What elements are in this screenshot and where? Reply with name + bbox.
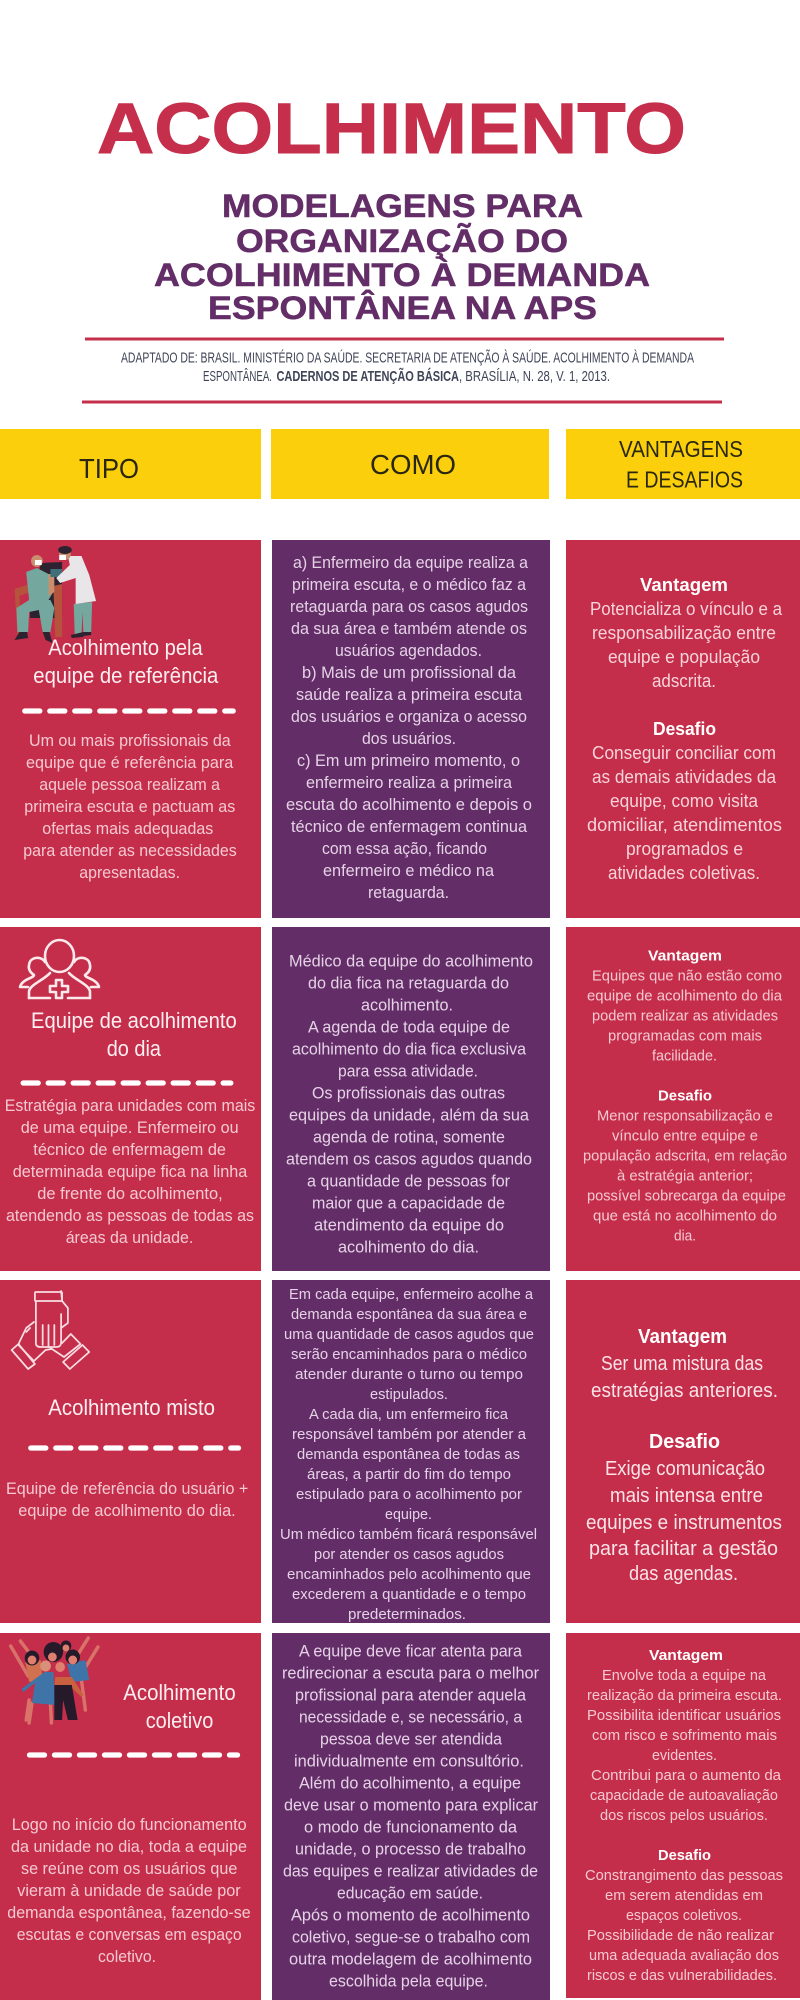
column header: vantagens e desafios: VANTAGENS (619, 436, 743, 462)
description: primeira escuta e pactuam as (24, 798, 235, 816)
description: equipe de acolhimento do dia. (18, 1502, 236, 1520)
description: Logo no início do funcionamento (12, 1816, 247, 1834)
panel: como, acolhimento coletivo: redirecionar a escuta para o melhor (282, 1665, 539, 1683)
heading: do dia (107, 1036, 162, 1061)
panel: como, acolhimento misto: atender durante o turno ou tempo (295, 1366, 523, 1383)
subtitle: ACOLHIMENTO À DEMANDA (154, 257, 650, 293)
panel: como, equipe de acolhimento do dia: maior que a capacidade de (312, 1195, 505, 1213)
panel: como, equipe de referência: escuta do acolhimento e depois o (286, 796, 532, 814)
panel: vantagem e desafio, acolhimento coletivo: Envolve toda a equipe na (602, 1667, 767, 1684)
panel: vantagem e desafio, acolhimento misto: Ser uma mistura das (601, 1353, 763, 1375)
panel: vantagem e desafio, equipe de acolhimento do dia (566, 927, 800, 1271)
column header: tipo: TIPO (79, 453, 139, 484)
panel: como, equipe de referência: b) Mais de um profissional da (302, 664, 517, 682)
panel: vantagem e desafio, acolhimento coletivo: Contribui para o aumento da (591, 1767, 782, 1784)
panel: como, acolhimento coletivo: Além do acolhimento, a equipe (299, 1775, 521, 1793)
panel: vantagem e desafio, acolhimento coletivo: uma adequada avaliação dos (589, 1947, 779, 1964)
panel: acolhimento pela equipe de referência (0, 540, 261, 918)
panel: como, acolhimento misto: encaminhados pelo acolhimento que (287, 1566, 531, 1583)
panel: como, equipe de acolhimento do dia: equipes da unidade, além da sua (289, 1107, 530, 1125)
panel: vantagem e desafio, equipe de referência: atividades coletivas. (608, 863, 760, 883)
description: técnico de enfermagem de (33, 1141, 226, 1159)
icon: medical team (20, 940, 99, 998)
panel: vantagem e desafio, acolhimento coletivo (566, 1633, 800, 1998)
description: demanda espontânea, fazendo-se (7, 1904, 251, 1922)
panel: como, equipe de referência: a) Enfermeiro da equipe realiza a (293, 554, 529, 572)
heading: equipe de referência (33, 663, 219, 688)
panel: vantagem e desafio, acolhimento misto: das agendas. (629, 1563, 738, 1585)
panel: vantagem e desafio, equipe de acolhimento do dia: Menor responsabilização e (597, 1108, 773, 1125)
panel: como, equipe de acolhimento do dia (272, 927, 550, 1271)
panel: como, acolhimento coletivo: necessidade e, se necessário, a (299, 1709, 523, 1727)
panel: vantagem e desafio, acolhimento misto: equipes e instrumentos (586, 1512, 782, 1534)
panel: vantagem e desafio, equipe de referência: Conseguir conciliar com (592, 743, 776, 763)
panel: vantagem e desafio, equipe de referência: Vantagem (640, 575, 728, 595)
source citation (121, 350, 694, 385)
panel: como, acolhimento misto: excederem a quantidade e o tempo (292, 1586, 526, 1603)
panel: como, equipe de acolhimento do dia: Médico da equipe do acolhimento (289, 953, 533, 971)
panel: vantagem e desafio, acolhimento misto: Desafio (649, 1431, 720, 1453)
panel: como, acolhimento misto: demanda espontânea de todas as (297, 1446, 520, 1463)
panel: como, equipe de acolhimento do dia: a quantidade de pessoas for (307, 1173, 510, 1191)
panel: vantagem e desafio, acolhimento coletivo: Possibilita identificar usuários (587, 1707, 781, 1724)
panel: como, acolhimento misto: por atender os casos agudos (314, 1546, 504, 1563)
panel: vantagem e desafio, equipe de acolhimento do dia: Vantagem (648, 948, 722, 965)
panel: vantagem e desafio, equipe de acolhimento do dia: população adscrita, em relação (583, 1148, 787, 1165)
column header: vantagens e desafios: E DESAFIOS (626, 466, 743, 492)
icon: nurse attending patient (15, 546, 96, 643)
panel: como, equipe de referência: com essa ação, ficando (322, 840, 487, 858)
subtitle: ORGANIZAÇÃO DO (236, 223, 568, 259)
panel: vantagem e desafio, equipe de acolhimento do dia: Equipes que não estão como (592, 968, 782, 985)
panel: como, equipe de referência: enfermeiro e médico na (323, 862, 495, 880)
description: ofertas mais adequadas (42, 820, 213, 838)
panel: vantagem e desafio, equipe de referência: Desafio (653, 719, 716, 739)
panel: como, equipe de acolhimento do dia: do dia fica na retaguarda do (308, 975, 509, 993)
panel: vantagem e desafio, acolhimento misto: Vantagem (638, 1326, 727, 1348)
description: vieram à unidade de saúde por (17, 1882, 241, 1900)
panel: como, acolhimento misto: uma quantidade de casos agudos que (284, 1326, 534, 1343)
panel: como, equipe de referência: dos usuários e organiza o acesso (291, 708, 527, 726)
panel: como, equipe de referência: primeira escuta, e o médico faz a (292, 576, 527, 594)
panel: vantagem e desafio, acolhimento misto (566, 1280, 800, 1623)
panel: vantagem e desafio, acolhimento coletivo: capacidade de autoavaliação (590, 1787, 778, 1804)
description: de uma equipe. Enfermeiro ou (21, 1119, 239, 1137)
panel: vantagem e desafio, acolhimento misto: para facilitar a gestão (589, 1538, 778, 1560)
panel: como, equipe de referência: retaguarda. (368, 884, 449, 902)
panel: vantagem e desafio, acolhimento coletivo: evidentes. (652, 1747, 717, 1764)
panel: vantagem e desafio, equipe de referência: domiciliar, atendimentos (587, 815, 782, 835)
panel: vantagem e desafio, acolhimento coletivo: Constrangimento das pessoas (585, 1867, 783, 1884)
panel: como, acolhimento coletivo: pessoa deve ser atendida (320, 1731, 503, 1749)
panel: como, equipe de referência: saúde realiza a primeira escuta (296, 686, 523, 704)
panel: como, acolhimento misto: estipulado para o acolhimento por (296, 1486, 522, 1503)
panel: vantagem e desafio, acolhimento misto: estratégias anteriores. (591, 1380, 778, 1402)
panel: como, acolhimento misto: A cada dia, um enfermeiro fica (309, 1406, 509, 1423)
panel: como, acolhimento coletivo: escolhida pela equipe. (329, 1973, 488, 1991)
heading: coletivo (146, 1708, 213, 1733)
panel: vantagem e desafio, equipe de referência: responsabilização entre (592, 623, 776, 643)
panel: como, acolhimento coletivo: outra modelagem de acolhimento (289, 1951, 532, 1969)
heading: Acolhimento misto (48, 1395, 215, 1420)
description: Equipe de referência do usuário + (6, 1480, 248, 1498)
panel: como, acolhimento misto: demanda espontânea da sua área e (291, 1306, 527, 1323)
subtitle (154, 188, 650, 326)
panel: equipe de acolhimento do dia (0, 927, 261, 1271)
panel: como, equipe de referência: dos usuários. (362, 730, 456, 748)
heading (31, 1008, 237, 1061)
title: ACOLHIMENTO (97, 90, 686, 169)
description (6, 1480, 248, 1520)
panel: vantagem e desafio, acolhimento coletivo: Desafio (658, 1847, 711, 1864)
panel: como, acolhimento misto: predeterminados. (348, 1606, 466, 1623)
subtitle: ESPONTÂNEA NA APS (208, 290, 597, 326)
panel: vantagem e desafio, acolhimento coletivo: com risco e sofrimento mais (592, 1727, 777, 1744)
description: para atender as necessidades (23, 842, 237, 860)
icon: group of women (11, 1638, 98, 1723)
panel: vantagem e desafio, equipe de acolhimento do dia: dia. (674, 1228, 696, 1245)
panel: como, equipe de referência: c) Em um primeiro momento, o (297, 752, 520, 770)
panel: como, acolhimento coletivo: educação em saúde. (337, 1885, 483, 1903)
panel: acolhimento misto (0, 1280, 261, 1623)
panel: acolhimento coletivo (0, 1633, 261, 2000)
panel: como, acolhimento misto: serão encaminhados para o médico (291, 1346, 527, 1363)
panel: vantagem e desafio, equipe de acolhimento do dia: equipe de acolhimento do dia (587, 988, 783, 1005)
description: escutas e conversas em espaço (17, 1926, 242, 1944)
panel: vantagem e desafio, acolhimento coletivo: riscos e das vulnerabilidades. (587, 1967, 777, 1984)
panel: vantagem e desafio, equipe de acolhimento do dia: à estratégia anterior; (617, 1168, 753, 1185)
panel: como, acolhimento coletivo: coletivo, segue-se o trabalho com (292, 1929, 530, 1947)
source citation: ESPONTÂNEA. (203, 368, 272, 385)
description: Estratégia para unidades com mais (5, 1097, 255, 1115)
panel: vantagem e desafio, equipe de referência: adscrita. (652, 671, 716, 691)
panel: vantagem e desafio, acolhimento coletivo: dos riscos pelos usuários. (600, 1807, 768, 1824)
panel: como, equipe de acolhimento do dia: atendem os casos agudos quando (286, 1151, 532, 1169)
panel: vantagem e desafio, equipe de referência: equipe, como visita (610, 791, 759, 811)
description: áreas da unidade. (66, 1229, 193, 1247)
panel: como, equipe de referência: retaguarda para os casos agudos (290, 598, 528, 616)
panel: vantagem e desafio, equipe de acolhimento do dia: programadas com mais (608, 1028, 762, 1045)
panel: como, equipe de acolhimento do dia: acolhimento. (361, 997, 453, 1015)
description: da unidade no dia, toda a equipe (11, 1838, 247, 1856)
panel: vantagem e desafio, acolhimento coletivo: em serem atendidas em (605, 1887, 763, 1904)
panel: como, acolhimento misto: áreas, a partir do fim do tempo (307, 1466, 511, 1483)
panel: vantagem e desafio, acolhimento misto: Exige comunicação (605, 1458, 765, 1480)
panel: como, acolhimento coletivo: profissional para atender aquela (295, 1687, 527, 1705)
source citation: , BRASÍLIA, N. 28, V. 1, 2013. (459, 368, 610, 385)
column header: vantagens e desafios (566, 429, 800, 499)
description: coletivo. (98, 1948, 156, 1966)
panel: vantagem e desafio, equipe de acolhimento do dia: que está no acolhimento do (593, 1208, 777, 1225)
source citation: CADERNOS DE ATENÇÃO BÁSICA (276, 367, 459, 385)
heading (33, 635, 219, 688)
column header: como: COMO (370, 449, 456, 480)
panel: como, acolhimento coletivo: A equipe deve ficar atenta para (299, 1643, 523, 1661)
subtitle: MODELAGENS PARA (222, 188, 583, 224)
heading: Acolhimento pela (48, 635, 203, 660)
description (23, 732, 237, 882)
description: atendendo as pessoas de todas as (6, 1207, 254, 1225)
panel: como, acolhimento misto: equipe. (385, 1506, 432, 1523)
panel: vantagem e desafio, equipe de referência: as demais atividades da (592, 767, 777, 787)
panel: como, equipe de referência: da sua área e também atende os (291, 620, 527, 638)
panel: como, acolhimento coletivo: deve usar o momento para explicar (284, 1797, 538, 1815)
panel: vantagem e desafio, equipe de acolhimento do dia: vínculo entre equipe e (612, 1128, 758, 1145)
panel: vantagem e desafio, equipe de acolhimento do dia: facilidade. (652, 1048, 717, 1065)
panel: vantagem e desafio, equipe de acolhimento do dia: Desafio (658, 1088, 712, 1105)
panel: como, acolhimento misto: Um médico também ficará responsável (280, 1526, 537, 1543)
panel: como, equipe de acolhimento do dia: acolhimento do dia. (338, 1239, 479, 1257)
icon: stacked hands (12, 1291, 89, 1369)
panel: como, acolhimento misto: Em cada equipe, enfermeiro acolhe a (289, 1286, 534, 1303)
panel: como, acolhimento misto: responsável também por atender a (292, 1426, 527, 1443)
panel: como, equipe de acolhimento do dia: A agenda de toda equipe de (308, 1019, 510, 1037)
description: apresentadas. (79, 864, 180, 882)
panel: como, acolhimento coletivo: unidade, o processo de trabalho (295, 1841, 526, 1859)
panel: como, equipe de acolhimento do dia: agenda de rotina, somente (313, 1129, 505, 1147)
description (7, 1816, 251, 1966)
panel: como, acolhimento coletivo: o modo de funcionamento da (304, 1819, 518, 1837)
panel: vantagem e desafio, acolhimento coletivo: Vantagem (649, 1647, 723, 1664)
panel: como, equipe de acolhimento do dia: para essa atividade. (338, 1063, 478, 1081)
description (5, 1097, 255, 1247)
panel: vantagem e desafio, equipe de acolhimento do dia: podem realizar as atividades (592, 1008, 778, 1025)
panel: como, equipe de acolhimento do dia: Os profissionais das outras (312, 1085, 505, 1103)
panel: como, equipe de referência: técnico de enfermagem continua (291, 818, 528, 836)
description: determinada equipe fica na linha (13, 1163, 248, 1181)
panel: como, equipe de acolhimento do dia: atendimento da equipe do (314, 1217, 504, 1235)
column header: tipo (0, 429, 261, 499)
heading: Equipe de acolhimento (31, 1008, 237, 1033)
panel: vantagem e desafio, equipe de referência (566, 540, 800, 918)
panel: vantagem e desafio, equipe de referência: equipe e população (608, 647, 760, 667)
panel: vantagem e desafio, equipe de referência: programados e (626, 839, 743, 859)
panel: vantagem e desafio, equipe de referência: Potencializa o vínculo e a (590, 599, 783, 619)
panel: como, acolhimento misto (272, 1280, 550, 1623)
panel: como, equipe de referência: enfermeiro realiza a primeira (306, 774, 513, 792)
panel: como, acolhimento coletivo: individualmente em consultório. (294, 1753, 524, 1771)
panel: vantagem e desafio, acolhimento coletivo: espaços coletivos. (626, 1907, 742, 1924)
panel: como, acolhimento misto: estipulados. (370, 1386, 448, 1403)
description: Um ou mais profissionais da (29, 732, 232, 750)
panel: como, equipe de referência (272, 540, 550, 918)
description: de frente do acolhimento, (37, 1185, 223, 1203)
panel: como, acolhimento coletivo: Após o momento de acolhimento (291, 1907, 530, 1925)
heading (123, 1680, 236, 1733)
panel: vantagem e desafio, equipe de acolhimento do dia: possível sobrecarga da equipe (587, 1188, 786, 1205)
panel: vantagem e desafio, acolhimento coletivo: realização da primeira escuta. (587, 1687, 782, 1704)
panel: vantagem e desafio, acolhimento misto: mais intensa entre (610, 1485, 763, 1507)
panel: vantagem e desafio, acolhimento coletivo: Possibilidade de não realizar (587, 1927, 774, 1944)
heading: Acolhimento (123, 1680, 236, 1705)
description: se reúne com os usuários que (21, 1860, 237, 1878)
panel: como, equipe de acolhimento do dia: acolhimento do dia fica exclusiva (292, 1041, 527, 1059)
panel: como, equipe de referência: usuários agendados. (335, 642, 482, 660)
panel: como, acolhimento coletivo (272, 1633, 550, 2000)
panel: como, acolhimento coletivo: das equipes e realizar atividades de (283, 1863, 538, 1881)
description: aquele pessoa realizam a (39, 776, 221, 794)
column header: como (271, 429, 549, 499)
description: equipe que é referência para (26, 754, 234, 772)
